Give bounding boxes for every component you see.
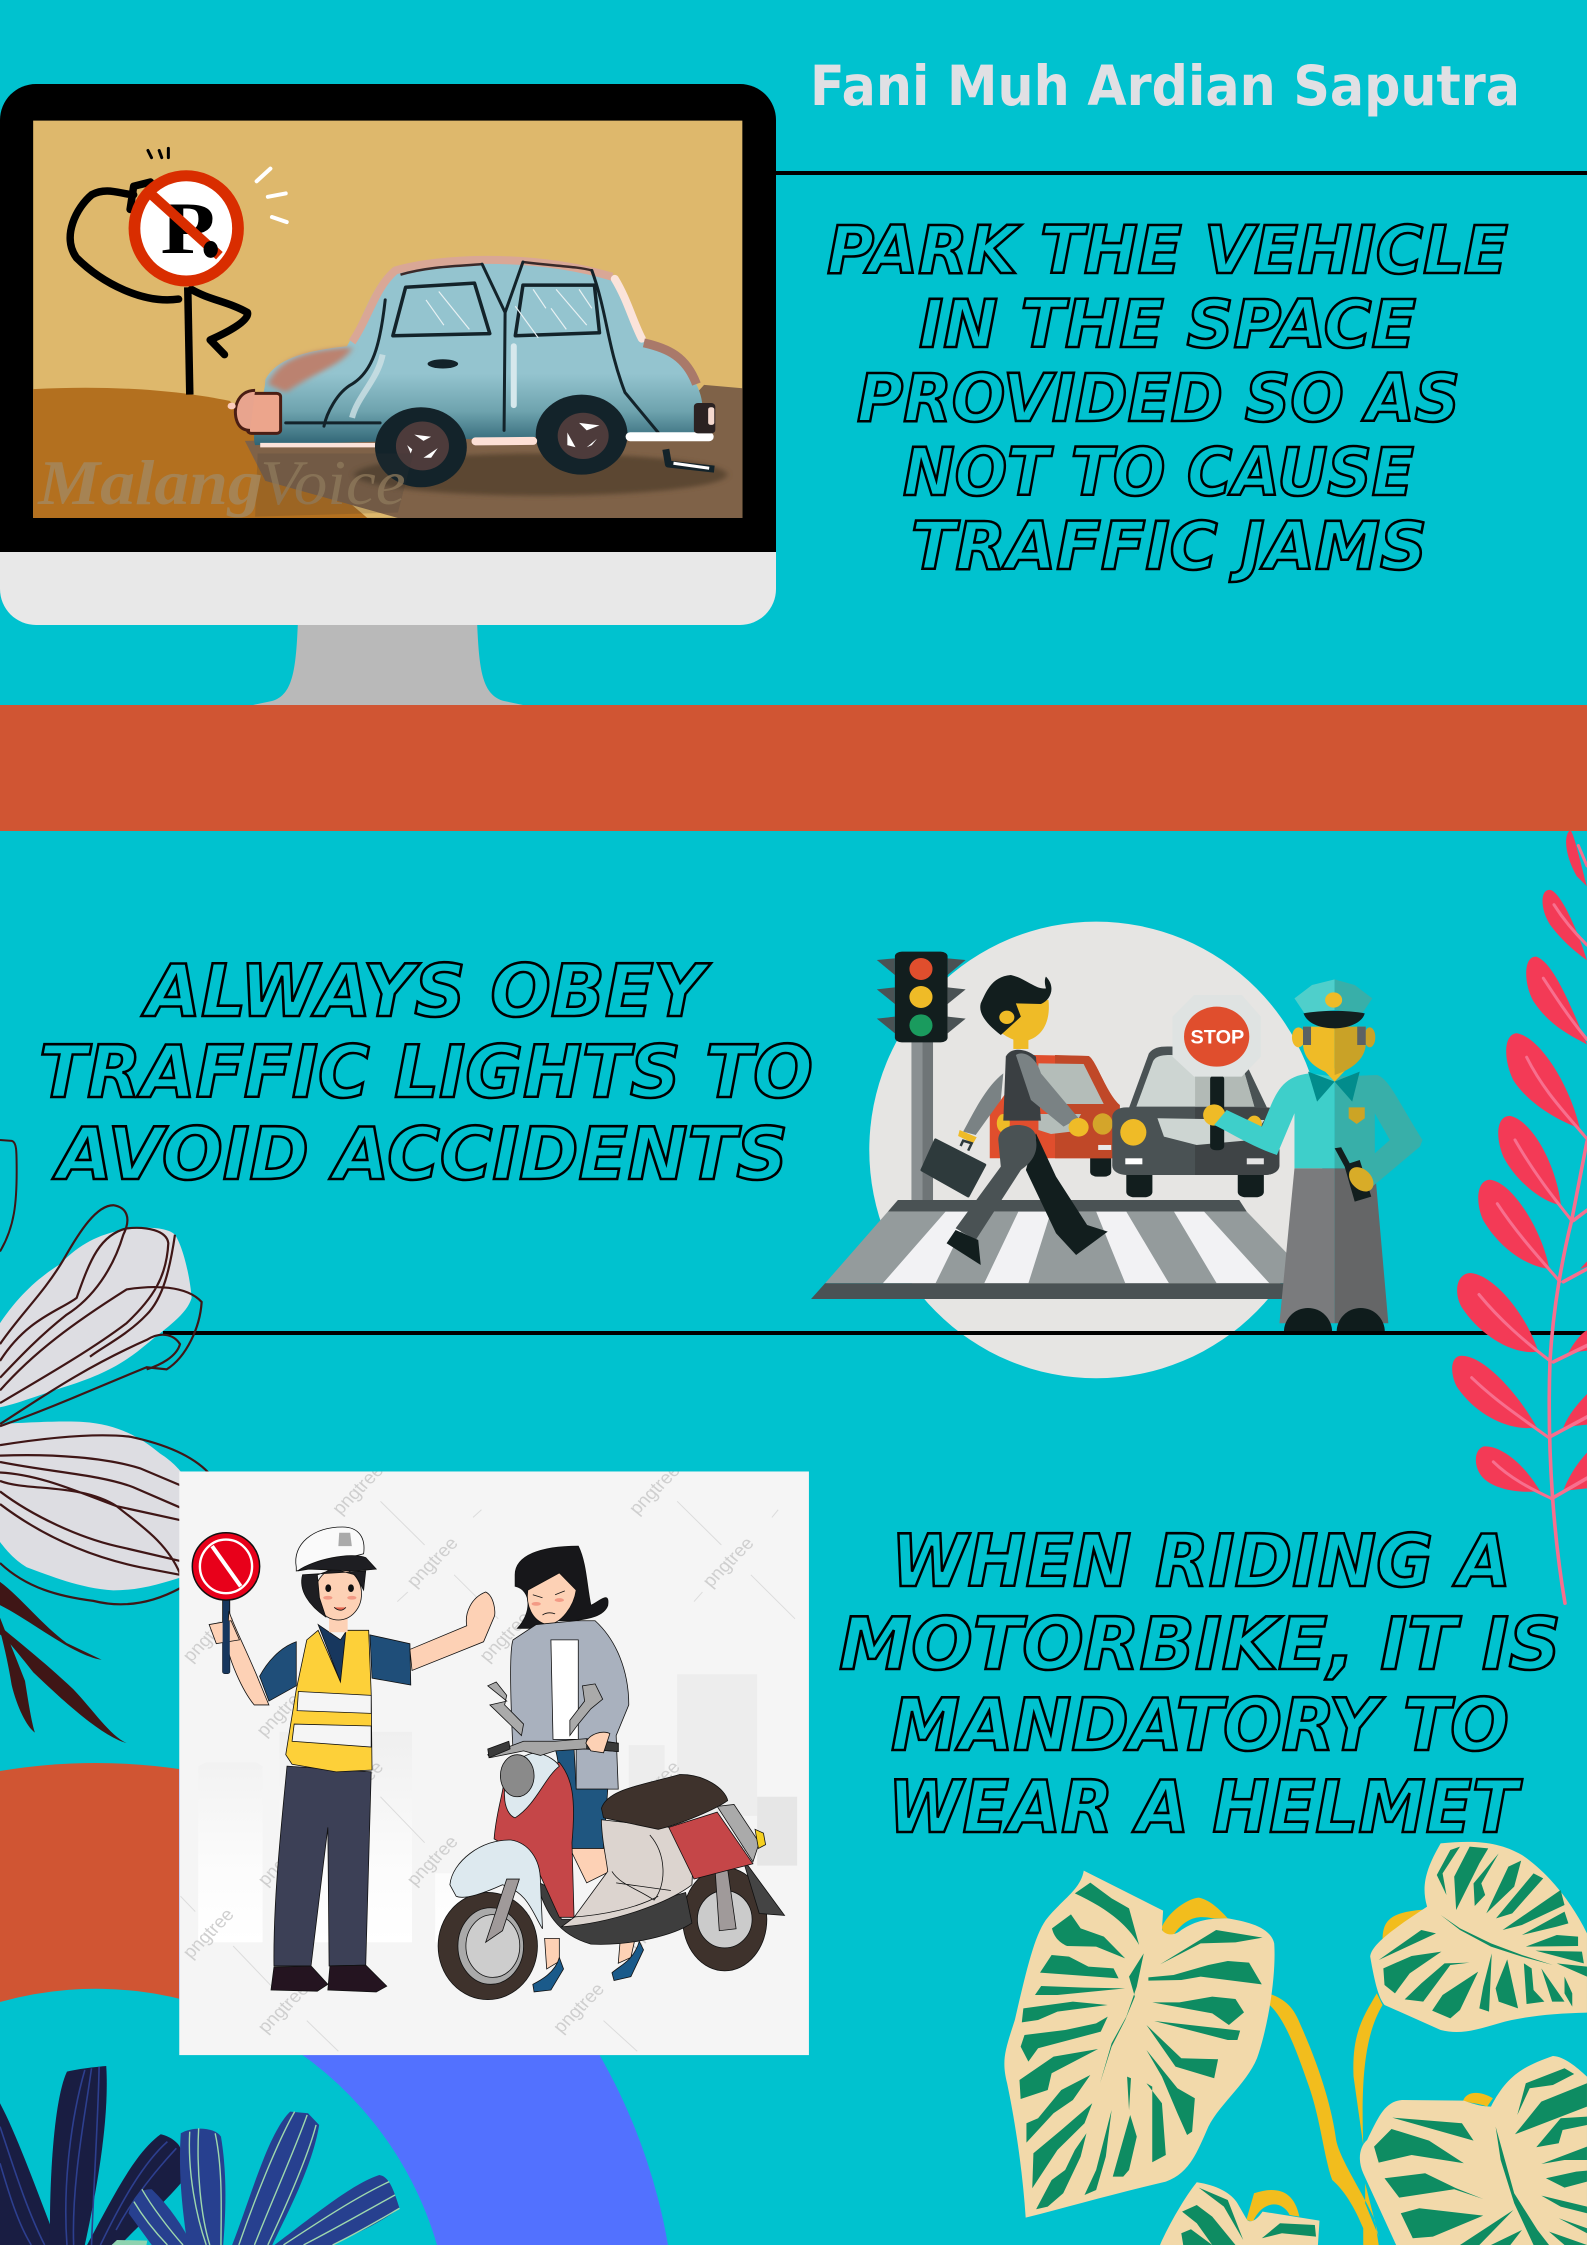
text block: park the vehicle: IN THE SPACE [919, 286, 1416, 363]
police officer [1203, 979, 1422, 1332]
decorative arc: orange and blue ring [0, 1763, 668, 2245]
watermark: Malang [37, 448, 263, 518]
traffic light [877, 952, 966, 1202]
monitor stand [253, 620, 523, 705]
red car [990, 1055, 1120, 1177]
orange band [0, 705, 1587, 831]
pngtree watermarks: pngtree [550, 1682, 611, 1740]
text block: park the vehicle: PARK THE VEHICLE [827, 212, 1508, 289]
faded city buildings [198, 1674, 797, 1942]
plant: tropical cream and green leaves [1004, 1842, 1587, 2245]
scooter [438, 1682, 785, 2000]
backdrop circle [869, 922, 1323, 1378]
leaf B [1370, 1842, 1587, 2032]
text block: obey traffic lights: ALWAYS OBEY [141, 949, 712, 1033]
pngtree watermarks: pngtree [698, 1832, 758, 1889]
plant: red branch right [1452, 830, 1587, 1603]
pedestrian with briefcase [922, 975, 1108, 1265]
screen: parked car illustration [33, 121, 742, 518]
text block: park the vehicle: PROVIDED SO AS [857, 360, 1460, 437]
pngtree watermarks: pngtree [253, 1979, 313, 2037]
plant: dark blue leaves bottom left [0, 2066, 400, 2245]
yellow stems [1162, 1898, 1493, 2245]
pngtree watermarks: pngtree [624, 1460, 684, 1518]
divider line middle [163, 1331, 1587, 1335]
panel: monitor with parking illustration [0, 84, 776, 705]
car [228, 257, 715, 487]
pngtree watermarks: pngtree [624, 1897, 684, 1954]
text block: wear a helmet [839, 1519, 1561, 1849]
woman [511, 1546, 644, 1992]
text block: wear a helmet: WHEN RIDING A [891, 1519, 1511, 1603]
pngtree watermarks: pngtree [253, 1832, 313, 1889]
leaf A [1004, 1871, 1275, 2218]
text block: wear a helmet: MOTORBIKE, IT IS [839, 1602, 1561, 1686]
text block: park the vehicle [827, 212, 1508, 585]
pngtree watermarks: pngtree [624, 1757, 684, 1815]
leaf D [1160, 2182, 1319, 2245]
pngtree watermarks: pngtree [178, 1608, 238, 1665]
text block: obey traffic lights [39, 949, 813, 1196]
pngtree watermarks: pngtree [327, 1757, 388, 1815]
panel: traffic scene illustration [811, 922, 1422, 1378]
panel: traffic officer and scooter picture [178, 1460, 809, 2055]
stop sign [1172, 995, 1261, 1150]
pngtree watermarks [178, 1460, 795, 2051]
traffic officer [192, 1527, 495, 1992]
pngtree watermarks: pngtree [475, 1608, 535, 1665]
pngtree watermarks: pngtree [178, 1904, 238, 1962]
crosswalk [811, 1200, 1287, 1299]
watermark [37, 448, 413, 518]
monitor frame [0, 84, 776, 552]
watermark: Voice [260, 448, 406, 518]
pngtree watermarks: pngtree [548, 1979, 608, 2037]
divider line top [776, 171, 1587, 175]
text block: obey traffic lights: TRAFFIC LIGHTS TO [39, 1030, 813, 1114]
leaf C [1360, 2056, 1587, 2245]
text block: wear a helmet: WEAR A HELMET [888, 1765, 1523, 1849]
pngtree watermarks: pngtree [402, 1533, 462, 1591]
stop sign: STOP [1191, 1027, 1244, 1048]
no parking sign figure [70, 148, 287, 395]
text block: obey traffic lights: AVOID ACCIDENTS [52, 1112, 788, 1196]
text block: wear a helmet: MANDATORY TO [891, 1683, 1509, 1767]
pngtree watermarks: pngtree [475, 1904, 535, 1962]
grey car [1112, 1046, 1279, 1197]
no parking sign figure: P [160, 187, 215, 269]
title: Fani Muh Ardian Saputra [810, 54, 1520, 118]
text block: park the vehicle: TRAFFIC JAMS [911, 508, 1427, 585]
monitor chin [0, 552, 776, 625]
pngtree watermarks: pngtree [402, 1832, 462, 1889]
pngtree watermarks: pngtree [327, 1460, 388, 1518]
text block: park the vehicle: NOT TO CAUSE [903, 434, 1414, 511]
flower: grey petals with dark outlines, left edge [0, 1140, 208, 1743]
pngtree watermarks: pngtree [698, 1533, 758, 1591]
pngtree watermarks: pngtree [251, 1682, 312, 1740]
